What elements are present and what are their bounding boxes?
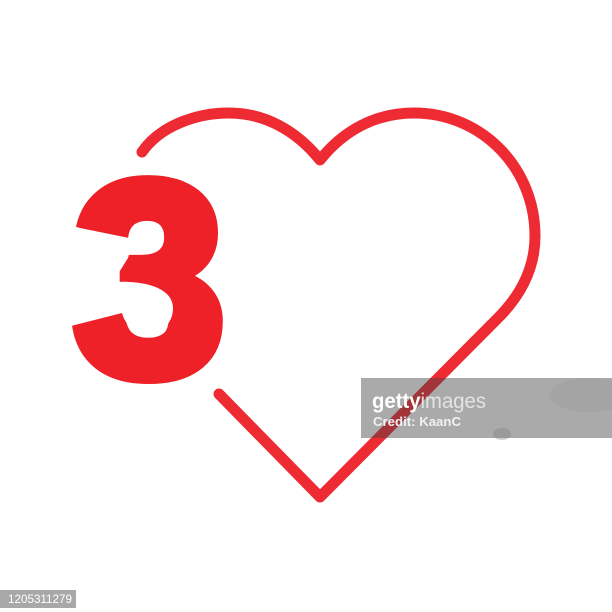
watermark logo text: gettyimages	[372, 390, 486, 413]
watermark panel	[361, 378, 612, 440]
image id tag	[0, 590, 76, 608]
icon: open heart outline	[142, 113, 535, 497]
numeral 3: 3	[73, 127, 225, 431]
image id tag: 1205311279	[8, 594, 72, 606]
watermark credit text: Credit: KaanC	[373, 414, 462, 429]
